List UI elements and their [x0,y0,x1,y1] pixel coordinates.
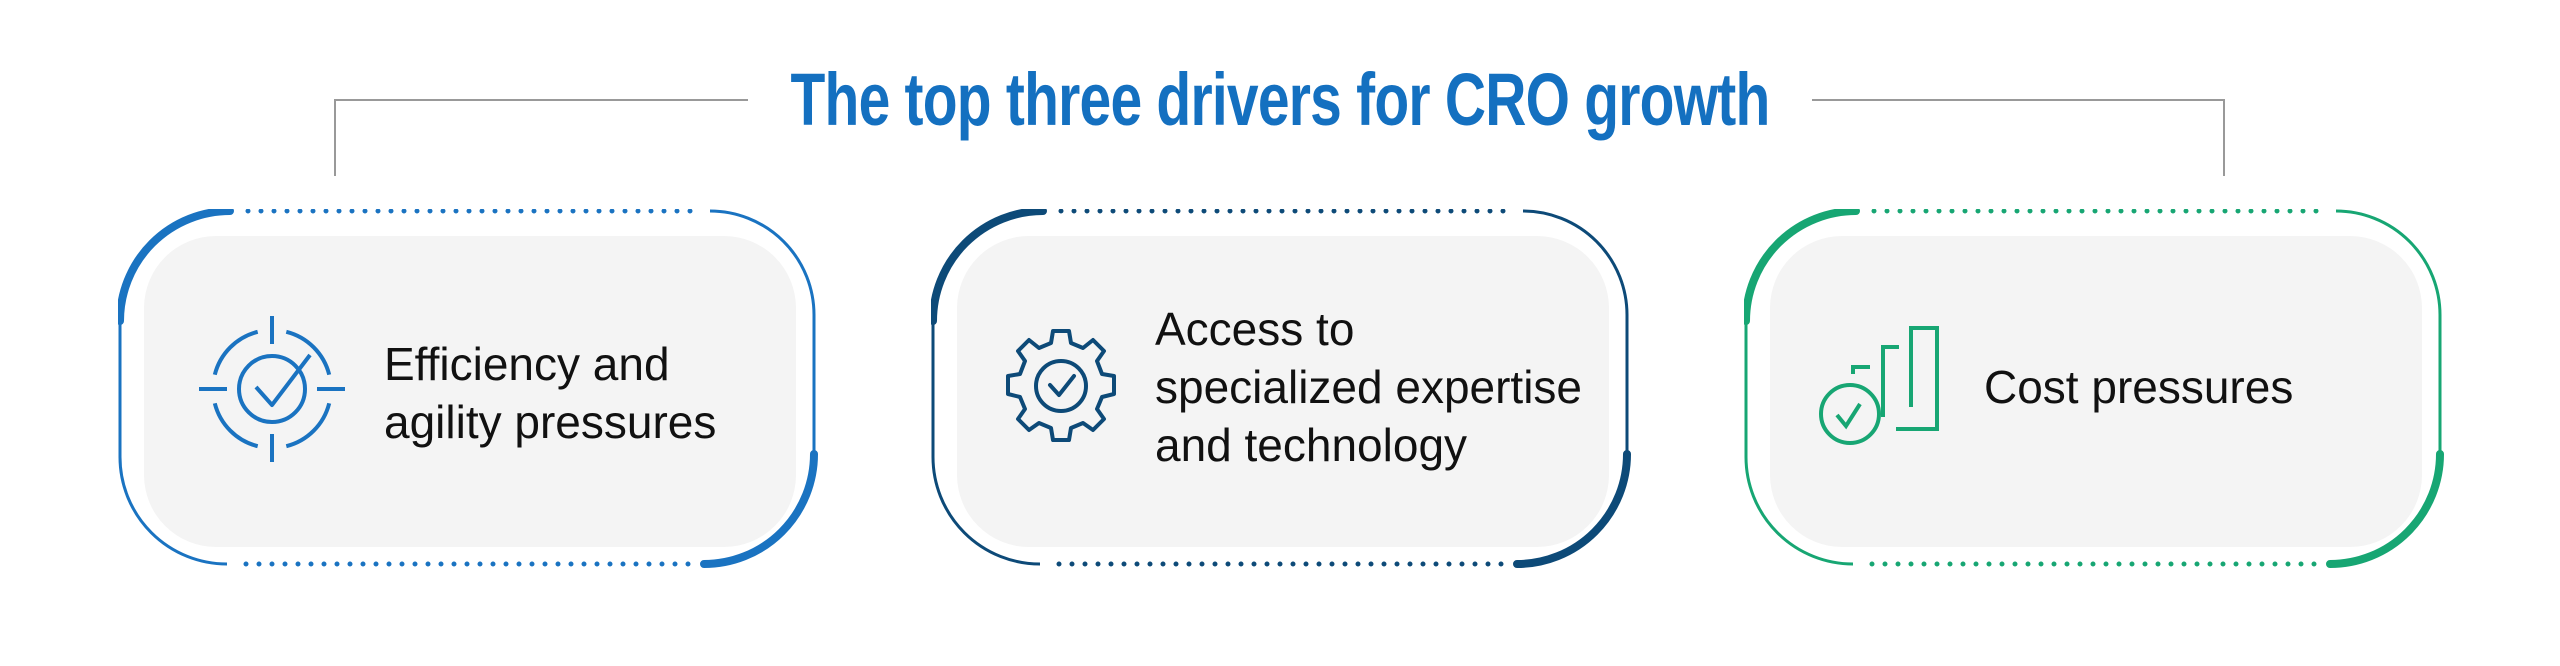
text: expertise [1155,303,1582,471]
icon: target check [199,316,345,462]
title: The top three drivers for CRO growth [790,58,1770,141]
panel: efficiency [118,209,818,568]
panel: cost [1744,209,2444,568]
icon: gear check [1008,331,1114,440]
text: expertise: specialized expertise [1155,361,1582,413]
bracket lines [334,99,2225,176]
icon: cost bars [1821,328,1937,443]
text: cost: Cost pressures [1984,361,2293,413]
panel: expertise [931,209,1631,568]
text: efficiency [384,338,716,448]
text: efficiency: agility pressures [384,396,716,448]
text: expertise: and technology [1155,419,1467,471]
text: expertise: Access to [1155,303,1354,355]
text: efficiency: Efficiency and [384,338,670,390]
